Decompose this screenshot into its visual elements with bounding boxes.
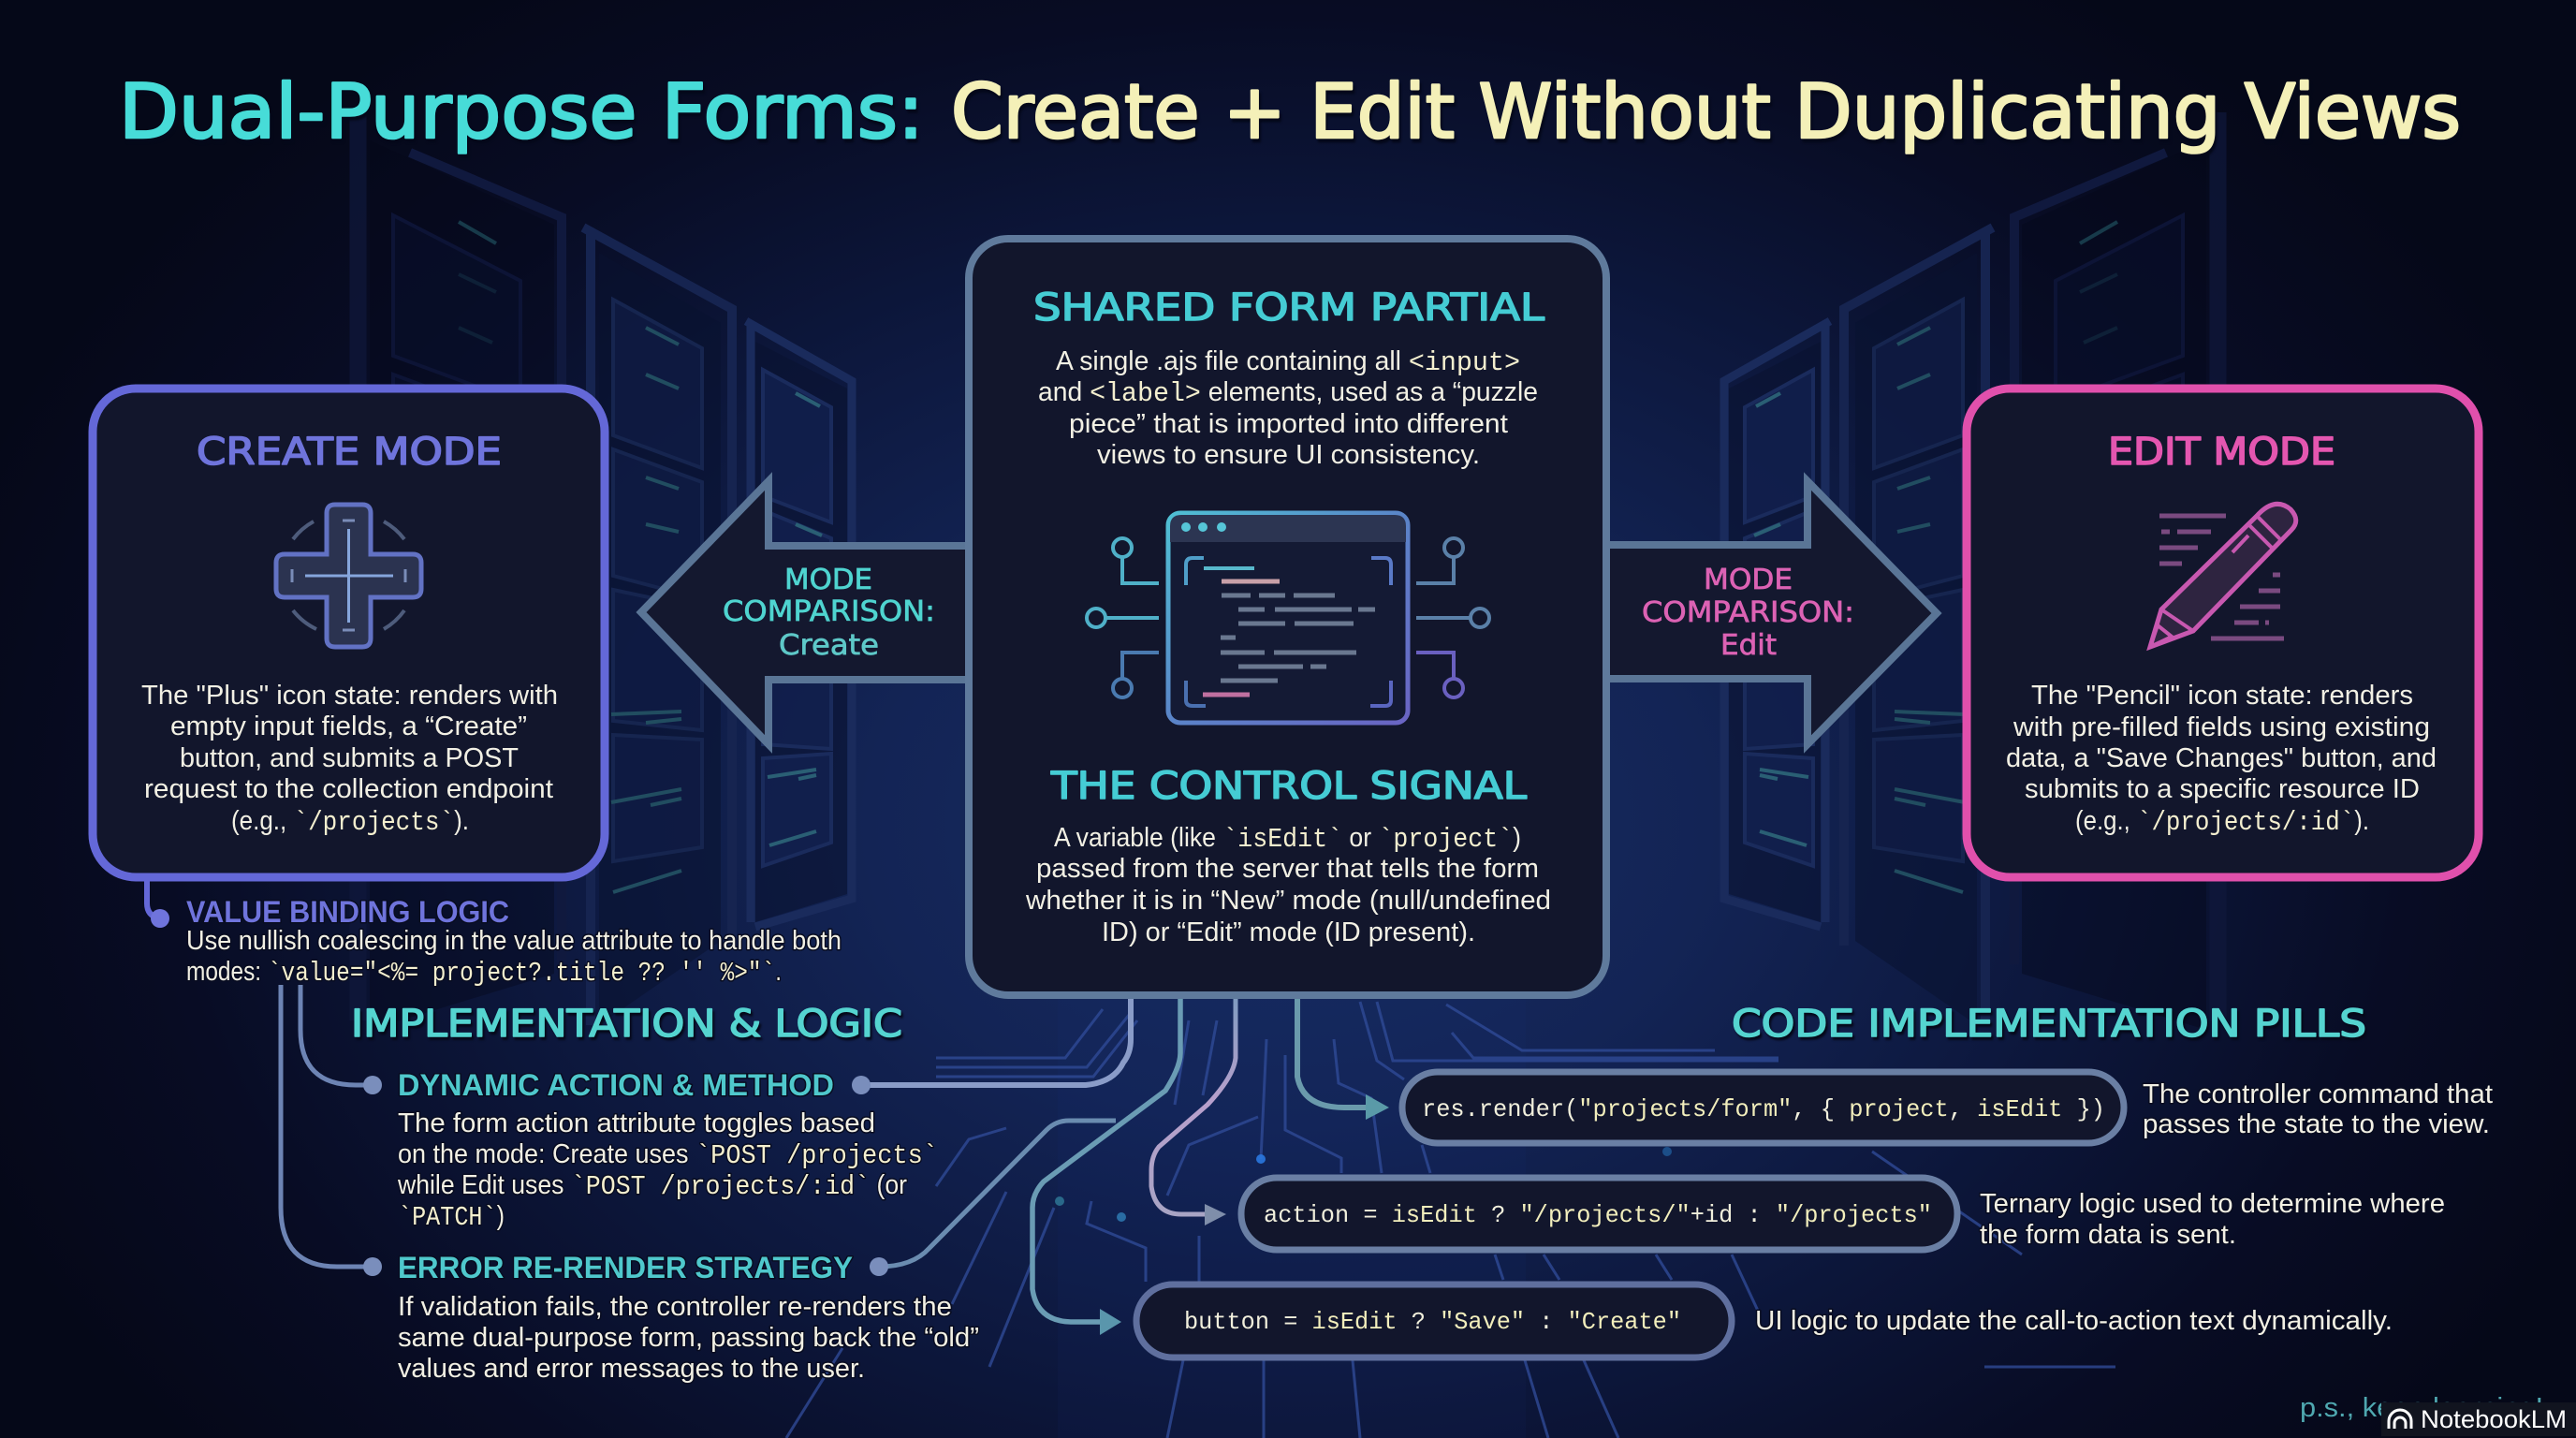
pill: res.render: res.render("projects/form", { project, isEdit }) bbox=[1422, 1095, 2105, 1123]
text: shared form description: piece” that is imported into different bbox=[1069, 409, 1508, 439]
text: create mode description: button, and submits a POST bbox=[180, 743, 519, 773]
arrow: mode comparison create bbox=[641, 481, 973, 744]
connector: trunk to button pill bbox=[1032, 992, 1180, 1335]
connector: panel to action pill bbox=[1151, 992, 1236, 1225]
panel: shared form partial bbox=[969, 239, 1606, 995]
caption: res.render bbox=[2143, 1079, 2493, 1139]
text: edit mode description: with pre-filled fields using existing bbox=[2012, 712, 2430, 742]
text: edit mode description: The "Pencil" icon state: renders bbox=[2031, 681, 2413, 711]
text: edit mode description: (e.g., `/projects/:id`). bbox=[2075, 806, 2369, 838]
pill: action ternary: action = isEdit ? "/projects/"+id : "/projects" bbox=[1264, 1201, 1932, 1229]
caption: action ternary: the form data is sent. bbox=[1980, 1220, 2236, 1250]
connector: dynamic action left bbox=[300, 985, 382, 1094]
text: edit mode description: data, a "Save Changes" button, and bbox=[2006, 743, 2437, 773]
block: value binding logic: VALUE BINDING LOGIC bbox=[186, 895, 509, 929]
heading: the control signal: THE CONTROL SIGNAL bbox=[1050, 765, 1528, 808]
icon: plus bbox=[276, 505, 421, 647]
text: edit mode description: submits to a specific resource ID bbox=[2025, 774, 2420, 804]
panel: create mode bbox=[93, 389, 605, 877]
block: error re-render strategy: ERROR RE-RENDER STRATEGY bbox=[398, 1251, 853, 1284]
block: error re-render strategy: values and error messages to the user. bbox=[398, 1354, 865, 1384]
text: create mode description bbox=[141, 681, 558, 838]
block: dynamic action and method: `PATCH`) bbox=[398, 1201, 505, 1233]
icon: code window with circuit connectors bbox=[1087, 513, 1489, 723]
caption: res.render: The controller command that bbox=[2143, 1079, 2493, 1109]
caption: action ternary bbox=[1980, 1189, 2445, 1250]
block: dynamic action and method: The form action attribute toggles based bbox=[398, 1108, 875, 1138]
pill: button ternary bbox=[1136, 1284, 1732, 1357]
text: control signal description: passed from the server that tells the form bbox=[1036, 854, 1539, 884]
text: control signal description bbox=[1025, 823, 1551, 947]
block: value binding logic bbox=[186, 895, 842, 989]
block: dynamic action and method: on the mode: Create uses `POST /projects` bbox=[398, 1139, 938, 1171]
connector: value binding bbox=[147, 878, 169, 928]
text: control signal description: A variable (like `isEdit` or `project`) bbox=[1054, 823, 1521, 855]
caption: res.render: passes the state to the view. bbox=[2143, 1109, 2490, 1139]
text: create mode description: empty input fields, a “Create” bbox=[170, 712, 527, 741]
arrow: mode comparison edit bbox=[1603, 481, 1937, 744]
text: create mode description: request to the collection endpoint bbox=[144, 774, 553, 804]
heading: edit mode: EDIT MODE bbox=[2108, 431, 2335, 474]
arrow: mode comparison edit: Edit bbox=[1720, 629, 1777, 662]
heading: create mode: CREATE MODE bbox=[197, 431, 502, 474]
title bbox=[119, 68, 2461, 155]
arrow: mode comparison edit: MODE bbox=[1704, 564, 1793, 596]
title: Dual-Purpose Forms: bbox=[119, 68, 924, 155]
icon: pencil bbox=[2150, 504, 2296, 647]
footer note: p.s., keep learning! bbox=[2300, 1393, 2543, 1423]
connector: panel to res.render pill bbox=[1297, 992, 1389, 1120]
connector: dynamic action to panel bbox=[852, 992, 1131, 1094]
text: shared form description bbox=[1038, 346, 1538, 470]
block: value binding logic: Use nullish coalescing in the value attribute to handle both bbox=[186, 926, 842, 956]
heading: implementation and logic: IMPLEMENTATION & LOGIC bbox=[351, 1003, 902, 1046]
text: shared form description: views to ensure UI consistency. bbox=[1097, 440, 1480, 470]
block: dynamic action and method: while Edit uses `POST /projects/:id` (or bbox=[397, 1170, 907, 1202]
block: error re-render strategy bbox=[398, 1251, 979, 1384]
pill: action ternary bbox=[1241, 1178, 1957, 1250]
connector: error strategy to panel bbox=[870, 1121, 1116, 1276]
text: control signal description: ID) or “Edit” mode (ID present). bbox=[1102, 917, 1475, 947]
badge: NotebookLM bbox=[2381, 1402, 2576, 1436]
caption: button ternary: UI logic to update the call-to-action text dynamically. bbox=[1755, 1306, 2393, 1336]
panel: edit mode bbox=[1967, 389, 2479, 877]
arrow: mode comparison create: MODE bbox=[784, 564, 872, 596]
badge: NotebookLM: NotebookLM bbox=[2421, 1405, 2567, 1433]
block: value binding logic: modes: `value="<%= project?.title ?? '' %>"`. bbox=[186, 957, 782, 989]
heading: code implementation pills: CODE IMPLEMENTATION PILLS bbox=[1732, 1003, 2366, 1046]
arrow: mode comparison edit: COMPARISON: bbox=[1642, 596, 1854, 629]
pill: button ternary: button = isEdit ? "Save" : "Create" bbox=[1184, 1308, 1681, 1336]
pill: res.render bbox=[1402, 1072, 2124, 1143]
arrow: mode comparison create: COMPARISON: bbox=[723, 595, 935, 628]
text: control signal description: whether it is in “New” mode (null/undefined bbox=[1025, 886, 1551, 916]
caption: action ternary: Ternary logic used to determine where bbox=[1980, 1189, 2445, 1219]
text: shared form description: A single .ajs file containing all <input> bbox=[1056, 346, 1520, 378]
heading: shared form partial: SHARED FORM PARTIAL bbox=[1033, 286, 1545, 330]
block: dynamic action and method: DYNAMIC ACTION & METHOD bbox=[398, 1068, 834, 1102]
title: Create + Edit Without Duplicating Views bbox=[951, 68, 2461, 155]
connector: error strategy left bbox=[281, 985, 382, 1276]
block: error re-render strategy: If validation fails, the controller re-renders the bbox=[398, 1292, 952, 1322]
text: edit mode description bbox=[2006, 681, 2437, 838]
text: shared form description: and <label> elements, used as a “puzzle bbox=[1038, 377, 1538, 409]
text: create mode description: (e.g., `/projects`). bbox=[231, 806, 469, 838]
text: create mode description: The "Plus" icon state: renders with bbox=[141, 681, 558, 711]
block: dynamic action and method bbox=[397, 1068, 938, 1233]
block: error re-render strategy: same dual-purpose form, passing back the “old” bbox=[398, 1323, 979, 1353]
arrow: mode comparison create: Create bbox=[779, 629, 879, 662]
